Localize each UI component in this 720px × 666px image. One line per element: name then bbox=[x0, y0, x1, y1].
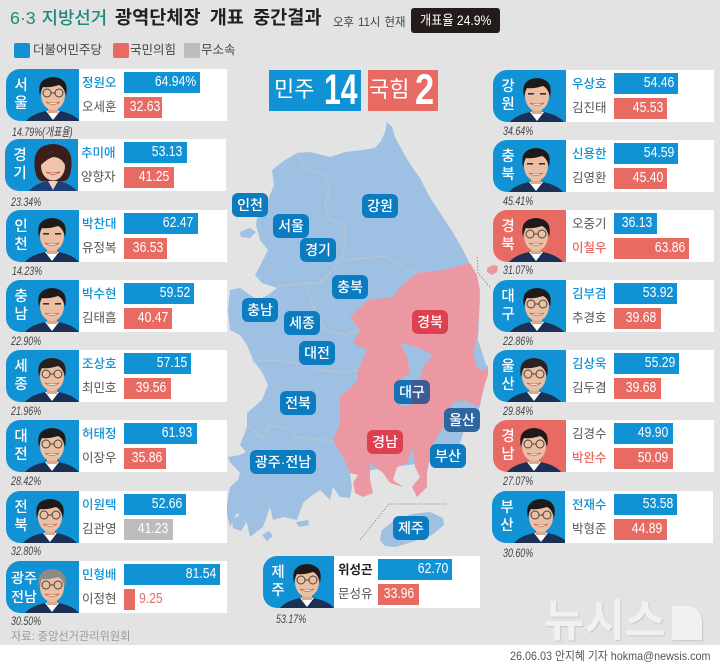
panel: 세종: 종 bbox=[14, 377, 28, 393]
panel: 대구 bbox=[493, 280, 714, 332]
turnout: 강원: 34.64% bbox=[503, 124, 533, 138]
panel: 대전: 전 bbox=[14, 447, 28, 463]
turnout: 제주: 53.17% bbox=[276, 612, 306, 626]
panel: 충북: 신용한 bbox=[572, 146, 607, 160]
panel: 부산: 산 bbox=[500, 518, 514, 534]
map label: 부산: 부산 bbox=[435, 448, 461, 464]
panel: 광주·전남: 전남 bbox=[11, 588, 37, 604]
panel: 대구: 53.92 bbox=[643, 285, 673, 301]
panel: 울산: 김상욱 bbox=[572, 357, 607, 371]
panel: 전북: 김관영 bbox=[82, 522, 117, 536]
panel: 경남: 박완수 bbox=[572, 451, 607, 465]
map label: 충북: 충북 bbox=[337, 279, 363, 295]
panel: 세종: 최민호 bbox=[82, 381, 117, 395]
panel: 서울: 오세훈 bbox=[82, 100, 117, 114]
map label: 충남: 충남 bbox=[247, 302, 273, 318]
panel: 경기: 41.25 bbox=[139, 169, 170, 185]
panel: 부산: 53.58 bbox=[643, 496, 673, 512]
panel: 경북 bbox=[493, 210, 714, 262]
map label: 인천: 인천 bbox=[237, 197, 263, 213]
panel: 제주: 문성유 bbox=[338, 587, 373, 601]
map label: 울산: 울산 bbox=[449, 412, 475, 428]
panel: 충북: 충 bbox=[501, 148, 515, 164]
panel: 대전 bbox=[6, 420, 227, 472]
panel: 경북: 오중기 bbox=[572, 216, 607, 230]
panel: 경북: 경 bbox=[501, 218, 515, 234]
map label: 경남: 경남 bbox=[372, 434, 398, 450]
panel: 경북: 36.13 bbox=[622, 214, 652, 230]
turnout: 울산: 29.84% bbox=[503, 404, 533, 418]
map label: 대전 bbox=[299, 341, 335, 365]
panel: 충북: 북 bbox=[501, 166, 515, 182]
panel: 충남: 남 bbox=[14, 307, 28, 323]
panel: 울산: 김두겸 bbox=[572, 381, 607, 395]
watermark: 뉴시스 logo: 뉴시스 bbox=[544, 597, 665, 646]
panel: 전북: 북 bbox=[14, 518, 28, 534]
panel: 서울: 서 bbox=[14, 78, 28, 94]
turnout: 대구: 22.86% bbox=[503, 334, 533, 348]
source: 자료: 중앙선거관리위원회 bbox=[11, 631, 130, 643]
panel: 세종 bbox=[6, 350, 227, 402]
panel: 대구: 대 bbox=[501, 289, 515, 305]
panel: 충남: 김태흠 bbox=[82, 311, 117, 325]
panel: 충북: 45.40 bbox=[633, 170, 663, 186]
panel: 제주 bbox=[263, 556, 480, 608]
seat tally: 국힘 2: 2 bbox=[415, 66, 434, 114]
panel: 제주: 위성곤 bbox=[338, 563, 373, 577]
panel: 서울: 정원오 bbox=[82, 76, 117, 90]
panel: 세종: 39.56 bbox=[136, 380, 166, 396]
map label: 충남 bbox=[242, 298, 278, 322]
panel: 충남: 59.52 bbox=[160, 285, 190, 301]
map: 대구 bbox=[395, 343, 433, 407]
panel: 대구: 구 bbox=[501, 307, 515, 323]
map label: 울산 bbox=[444, 408, 480, 432]
panel: 강원 bbox=[493, 70, 714, 122]
panel: 강원: 54.46 bbox=[644, 74, 674, 90]
seat tally: 국힘 2 bbox=[368, 70, 438, 111]
panel: 인천: 박찬대 bbox=[82, 217, 117, 231]
map label: 세종: 세종 bbox=[289, 315, 315, 331]
legend: 더불어민주당 bbox=[33, 43, 102, 57]
time note: 오후 11시 현재 bbox=[333, 15, 406, 29]
panel: 부산: 박형준 bbox=[572, 522, 607, 536]
panel: 경북: 63.86 bbox=[655, 240, 685, 256]
panel: 강원: 원 bbox=[501, 96, 515, 112]
turnout: 부산: 30.60% bbox=[503, 546, 533, 560]
panel: 광주·전남: 9.25 bbox=[139, 590, 163, 606]
panel: 대전: 허태정 bbox=[82, 427, 117, 441]
credit line: 26.06.03 안지혜 기자 hokma@newsis.com bbox=[510, 649, 711, 663]
map label: 전북: 전북 bbox=[285, 395, 311, 411]
panel: 부산 bbox=[492, 491, 713, 543]
map label: 강원: 강원 bbox=[367, 198, 393, 214]
panel: 강원: 강 bbox=[501, 78, 515, 94]
panel: 강원: 45.53 bbox=[633, 100, 663, 116]
seat tally: 민주 14: 14 bbox=[324, 66, 357, 114]
map label: 전북 bbox=[280, 391, 316, 415]
panel: 서울: 32.63 bbox=[130, 99, 160, 115]
map label: 세종 bbox=[284, 311, 320, 335]
turnout: 광주·전남: 30.50% bbox=[11, 614, 41, 628]
seat tally: 민주 14: 민주 bbox=[274, 77, 314, 102]
panel: 광주·전남: 광주 bbox=[11, 570, 37, 586]
turnout: 경기: 23.34% bbox=[11, 195, 41, 209]
map label: 인천 bbox=[232, 193, 268, 217]
turnout: 전북: 32.80% bbox=[11, 544, 41, 558]
map label: 경기 bbox=[300, 238, 336, 262]
panel: 인천: 62.47 bbox=[163, 215, 194, 231]
map label: 서울 bbox=[273, 214, 309, 238]
panel: 전북: 이원택 bbox=[82, 498, 117, 512]
map label: 부산 bbox=[430, 444, 466, 468]
seat tally: 민주 14 bbox=[269, 70, 361, 111]
map label: 광주·전남 bbox=[250, 450, 316, 474]
panel: 부산: 44.89 bbox=[632, 521, 662, 537]
panel: 대전: 61.93 bbox=[162, 425, 192, 441]
title bbox=[10, 7, 322, 28]
panel: 광주·전남: 81.54 bbox=[186, 566, 216, 582]
panel: 울산: 39.68 bbox=[626, 380, 656, 396]
panel: 세종: 세 bbox=[14, 359, 28, 375]
counting rate badge: 개표율 24.9% bbox=[420, 13, 491, 28]
map label: 제주: 제주 bbox=[398, 520, 424, 536]
panel: 충북: 54.59 bbox=[644, 144, 674, 160]
panel: 경남: 50.09 bbox=[638, 450, 668, 466]
panel: 경기: 추미애 bbox=[81, 146, 116, 160]
panel: 서울: 64.94% bbox=[155, 74, 196, 90]
panel: 경기: 양향자 bbox=[81, 170, 116, 184]
map: inset guide lines bbox=[360, 257, 490, 540]
map label: 경기: 경기 bbox=[305, 242, 331, 258]
map: 울산 부산 bbox=[430, 400, 480, 460]
panel: 인천: 유정복 bbox=[82, 241, 117, 255]
map label: 서울: 서울 bbox=[278, 218, 304, 234]
panel: 울산: 55.29 bbox=[645, 355, 675, 371]
panel: 전북: 52.66 bbox=[152, 496, 182, 512]
title: 6·3 지방선거 bbox=[10, 8, 107, 28]
panel: 충남: 박수현 bbox=[82, 287, 117, 301]
panel: 전북 bbox=[6, 490, 227, 542]
map label: 경북: 경북 bbox=[417, 314, 443, 330]
panel: 대구: 추경호 bbox=[572, 311, 607, 325]
panel: 전북: 전 bbox=[14, 500, 28, 516]
panel: 세종: 조상호 bbox=[82, 357, 117, 371]
panel: 인천: 36.53 bbox=[133, 240, 163, 256]
panel: 제주: 33.96 bbox=[384, 586, 414, 602]
map label: 대전: 대전 bbox=[304, 345, 330, 361]
turnout: 인천: 14.23% bbox=[12, 264, 42, 278]
turnout: 충북: 45.41% bbox=[503, 194, 533, 208]
panel: 인천: 인 bbox=[14, 219, 28, 235]
panel: 서울: 울 bbox=[14, 96, 28, 112]
panel: 울산: 울 bbox=[501, 359, 515, 375]
map: 제주 island bbox=[380, 512, 444, 547]
panel: 경남: 경 bbox=[501, 429, 515, 445]
panel: 충남 bbox=[6, 280, 227, 332]
panel: 충북: 김영환 bbox=[572, 170, 607, 184]
panel: 경기: 경 bbox=[13, 148, 27, 164]
turnout: 충남: 22.90% bbox=[11, 334, 41, 348]
panel: 경북: 이철우 bbox=[572, 240, 607, 254]
panel: 대구: 39.68 bbox=[626, 310, 656, 326]
panel: 인천: 천 bbox=[14, 237, 28, 253]
panel: 광주·전남: 민형배 bbox=[82, 568, 117, 582]
counting rate badge bbox=[411, 8, 500, 33]
panel: 경남: 남 bbox=[501, 447, 515, 463]
title: 광역단체장 개표 중간결과 bbox=[115, 7, 322, 28]
panel: 광주·전남: 이정현 bbox=[82, 592, 117, 606]
panel: 경남: 49.90 bbox=[638, 425, 668, 441]
panel: 서울 bbox=[6, 69, 227, 121]
map label: 제주 bbox=[393, 516, 429, 540]
map: red provinces 경북 경남 bbox=[333, 263, 498, 497]
panel: 경기 bbox=[5, 139, 226, 191]
map label: 대구 bbox=[394, 380, 430, 404]
panel: 부산: 부 bbox=[500, 500, 514, 516]
map label: 강원 bbox=[362, 194, 398, 218]
panel: 충북 bbox=[493, 140, 714, 192]
panel: 경남: 김경수 bbox=[572, 427, 607, 441]
map label: 광주·전남: 광주·전남 bbox=[255, 454, 311, 470]
turnout: 경남: 27.07% bbox=[503, 474, 533, 488]
turnout: 대전: 28.42% bbox=[11, 474, 41, 488]
panel: 울산: 산 bbox=[501, 377, 515, 393]
map label: 대구: 대구 bbox=[399, 384, 425, 400]
turnout: 서울: 14.79%(개표율) bbox=[12, 125, 73, 139]
panel: 세종: 57.15 bbox=[157, 355, 187, 371]
panel: 대전: 대 bbox=[14, 429, 28, 445]
panel: 충남: 충 bbox=[14, 289, 28, 305]
panel: 대구: 김부겸 bbox=[572, 287, 607, 301]
panel: 강원: 김진태 bbox=[572, 100, 607, 114]
map: blue provinces bbox=[226, 122, 488, 541]
panel: 인천 bbox=[6, 210, 227, 262]
map label: 경북 bbox=[412, 310, 448, 334]
panel: 부산: 전재수 bbox=[572, 498, 607, 512]
panel: 제주: 주 bbox=[271, 583, 285, 599]
turnout: 경북: 31.07% bbox=[503, 263, 533, 277]
map label: 충북 bbox=[332, 275, 368, 299]
panel: 경북: 북 bbox=[501, 236, 515, 252]
map label: 경남 bbox=[367, 430, 403, 454]
panel: 전북: 41.23 bbox=[138, 520, 168, 536]
panel: 울산 bbox=[493, 350, 714, 402]
panel: 제주: 62.70 bbox=[418, 561, 448, 577]
panel: 경기: 기 bbox=[13, 166, 27, 182]
panel: 대전: 35.86 bbox=[132, 450, 162, 466]
legend: 국민의힘 bbox=[130, 43, 176, 57]
panel: 경기: 53.13 bbox=[152, 144, 182, 160]
panel: 충남: 40.47 bbox=[138, 310, 168, 326]
seat tally: 국힘 2: 국힘 bbox=[369, 77, 409, 102]
turnout: 세종: 21.96% bbox=[11, 404, 41, 418]
panel: 광주·전남 bbox=[6, 560, 227, 612]
panel: 제주: 제 bbox=[271, 565, 285, 581]
panel: 대전: 이장우 bbox=[82, 451, 117, 465]
legend bbox=[14, 43, 236, 58]
panel: 경남 bbox=[493, 420, 714, 472]
panel: 강원: 우상호 bbox=[572, 76, 607, 90]
legend: 무소속 bbox=[201, 43, 236, 57]
